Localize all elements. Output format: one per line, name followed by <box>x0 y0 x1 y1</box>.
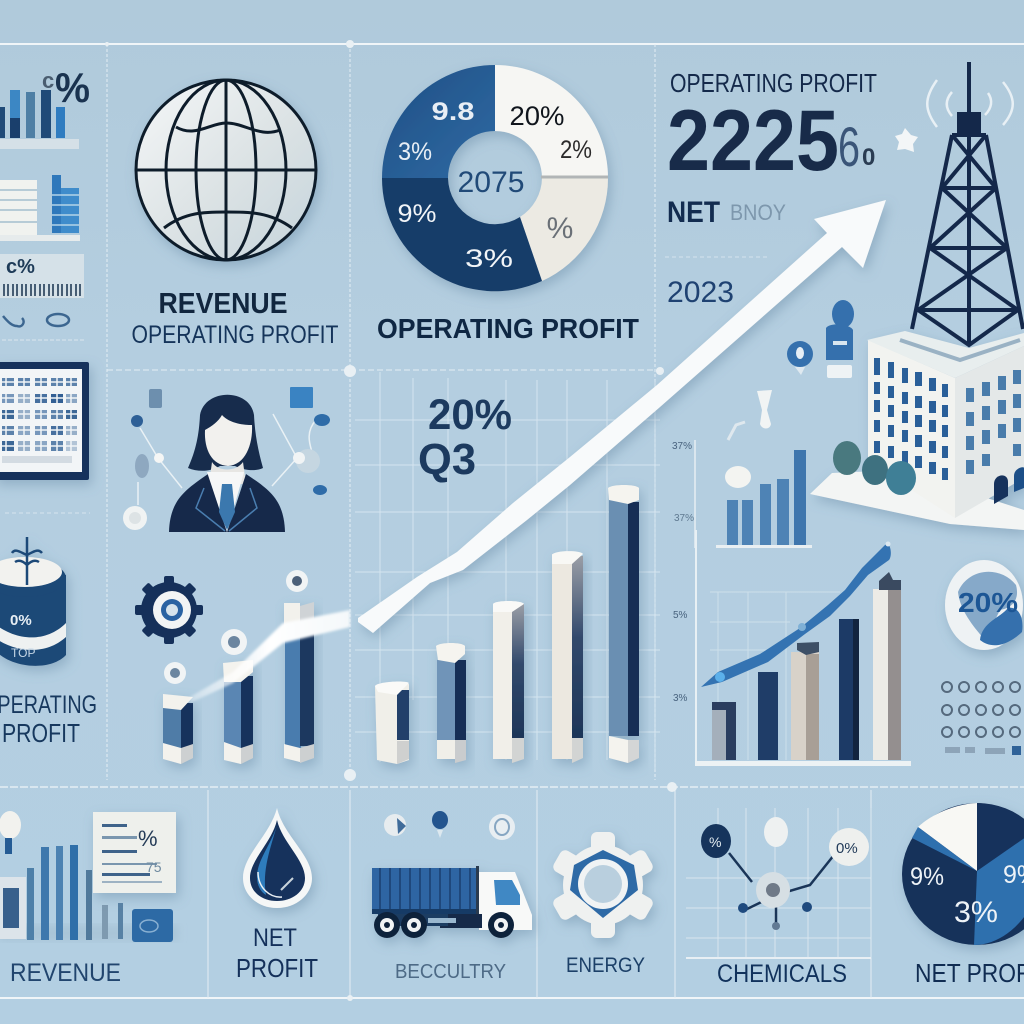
bar 3 <box>493 601 524 763</box>
donut labels: 3% <box>398 138 432 166</box>
building windows <box>874 358 948 480</box>
donut labels <box>398 98 592 273</box>
bar 5 <box>608 485 639 763</box>
text: 20%: 20% <box>428 391 512 439</box>
chart grid <box>355 372 660 770</box>
icon: person badge <box>787 300 854 378</box>
icon: small white marker <box>728 390 772 440</box>
chart: pie: 3% <box>954 896 998 929</box>
icon: revenue bars and document <box>0 811 178 942</box>
bar: textured 1 <box>712 702 736 760</box>
text: faded label: BECCULTRY <box>395 961 506 983</box>
panel: donut chart <box>377 65 639 344</box>
bar 2 <box>436 643 466 763</box>
icon: barcode card <box>0 254 84 298</box>
text: revenue: REVENUE <box>10 959 121 987</box>
icon: gear <box>135 576 203 644</box>
donut labels: 20% <box>510 101 564 131</box>
text: net: NET <box>667 196 720 229</box>
icon: stacked table bars <box>0 175 80 241</box>
bar 1 <box>375 682 409 764</box>
icon: 20% globe <box>945 560 1023 650</box>
panel: bottom chemicals <box>686 808 871 988</box>
text: big value: 2225 <box>667 93 839 189</box>
arrow: faded ribbon <box>190 610 350 703</box>
icon: 20% globe: 20% <box>958 587 1018 618</box>
chart: small blue bars: 3% <box>673 693 688 704</box>
icon: database cylinder: TOP <box>11 646 35 660</box>
chart: small blue bars: 37% <box>674 513 694 524</box>
text: faded label: BNOY <box>730 200 786 225</box>
panel: left column <box>0 64 97 748</box>
icon: truck <box>372 866 532 938</box>
panel: bottom energy <box>551 832 655 977</box>
panel: lower right chart <box>695 530 1023 766</box>
icon: sparkle <box>895 128 918 152</box>
donut labels: 2% <box>560 136 592 164</box>
chart: small blue bars: 5% <box>673 610 688 621</box>
text: operating profit partial <box>0 691 97 748</box>
donut labels: % <box>547 212 573 245</box>
panel: bottom revenue <box>0 811 178 987</box>
panel: bottom truck <box>372 811 532 983</box>
icon: molecule network: % <box>709 834 721 850</box>
panel: revenue globe <box>132 80 338 349</box>
text: energy: ENERGY <box>566 954 645 977</box>
network nodes <box>138 414 316 505</box>
text: year: 2023 <box>667 276 734 309</box>
text: operating profit: OPERATING PROFIT <box>377 313 639 344</box>
arrow: blue trend line <box>701 542 891 687</box>
icon: signal waves <box>927 80 1013 127</box>
icon: small badges <box>164 570 308 684</box>
text: operating profit partial: PROFIT <box>2 718 80 748</box>
panel: tower and building <box>672 62 1024 704</box>
text: Q3: Q3 <box>418 435 476 484</box>
panel: bottom net profit <box>236 808 318 983</box>
donut labels: 3% <box>465 245 513 273</box>
icon: barcode card: c% <box>6 256 35 278</box>
icon: water drop <box>243 808 312 908</box>
icon: revenue bars and document: 75 <box>146 859 162 875</box>
text: revenue: REVENUE <box>158 288 288 320</box>
icon: businesswoman <box>169 395 285 532</box>
chart grid <box>686 808 871 958</box>
text: big value: 0 <box>862 144 875 171</box>
bar: small 2 <box>223 660 253 764</box>
icon: mini bar chart with percent <box>0 64 90 149</box>
icon: mini bar chart with percent: c <box>42 68 54 93</box>
panel: top right stats <box>667 68 877 309</box>
bar: small 1 <box>163 694 193 764</box>
bar: textured 3 <box>791 642 819 760</box>
text: chemicals: CHEMICALS <box>717 960 847 988</box>
donut labels: 9.8 <box>432 98 475 126</box>
arrow: main growth arrow <box>358 200 886 633</box>
chart: small blue bars: 37% <box>672 441 692 452</box>
bar: textured 4 <box>839 619 859 760</box>
panel: gear and rising bars <box>135 570 350 764</box>
chart: pie: 9% <box>910 863 944 891</box>
panel: main growth chart <box>355 200 886 770</box>
donut labels: 9% <box>398 200 436 228</box>
icon: trees <box>833 441 916 495</box>
text: operating profit: OPERATING PROFIT <box>132 321 338 349</box>
panel: bottom net profit pie <box>902 803 1024 988</box>
panel joints <box>105 40 677 1001</box>
donut labels: 2075 <box>458 166 524 199</box>
icon: symbol grid <box>942 682 1021 755</box>
icon: tablet with table <box>0 362 89 480</box>
icon: small symbols <box>2 314 84 340</box>
text: net: NET <box>253 924 297 952</box>
bar 4 <box>552 551 583 763</box>
icon: gear <box>551 832 655 938</box>
icon: building <box>810 331 1024 530</box>
icon: molecule network <box>701 817 869 930</box>
icon: mini bar chart with percent: % <box>55 64 90 111</box>
icon: database cylinder: 0% <box>10 612 32 629</box>
text: big value: 6 <box>838 115 860 178</box>
icon: database cylinder <box>0 537 66 666</box>
icon: small symbols <box>384 811 515 840</box>
icon: tower <box>912 62 1023 345</box>
chart: pie <box>902 803 1024 945</box>
chart axis <box>696 530 840 762</box>
text: operating profit: OPERATING PROFIT <box>670 68 877 98</box>
icon: revenue bars and document: % <box>138 826 158 851</box>
chart: donut <box>382 65 608 291</box>
panel: person <box>123 387 330 532</box>
icon: globe <box>136 80 316 260</box>
bar: small 3 <box>284 602 314 763</box>
bar: textured 2 <box>758 672 778 760</box>
chart: small blue bars <box>672 440 812 704</box>
bar: textured 5 <box>873 572 901 760</box>
icon: molecule network: 0% <box>836 840 858 857</box>
text: profit: PROFIT <box>236 953 318 983</box>
